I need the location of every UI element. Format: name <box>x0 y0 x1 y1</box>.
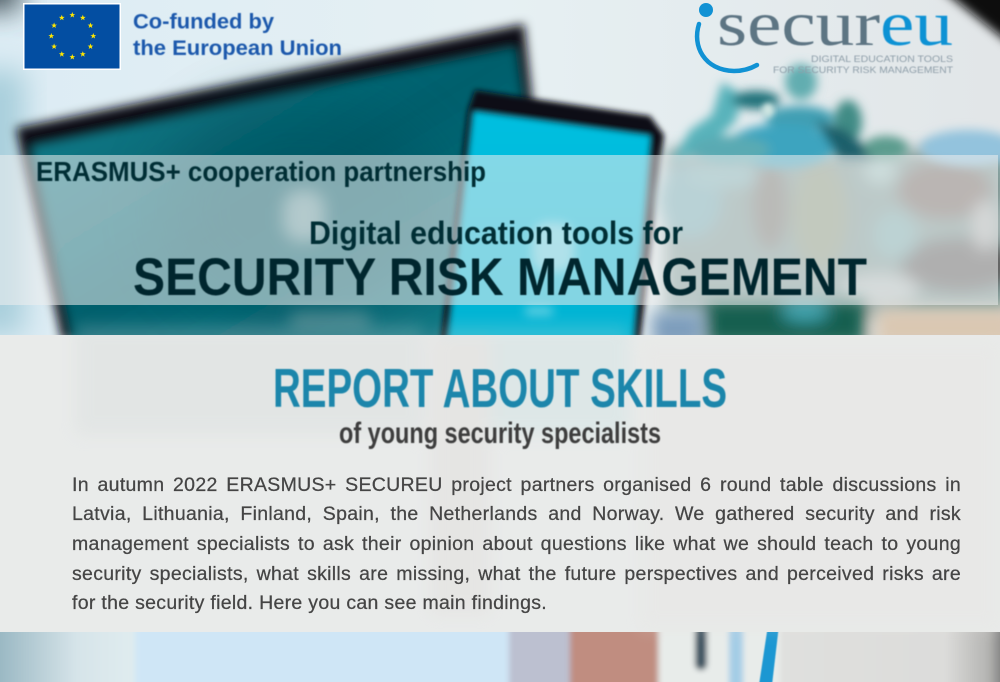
dark foliage below the band <box>652 300 1000 352</box>
EU flag <box>23 3 121 70</box>
logo tagline: DIGITAL EDUCATION TOOLS <box>811 54 953 65</box>
co-funded text <box>133 10 342 60</box>
co-funded text: Co-funded by <box>133 10 274 34</box>
top right dark corner <box>930 0 1000 52</box>
light spot between leaves <box>762 103 774 117</box>
title line one: Digital education tools for <box>309 215 683 251</box>
intro paragraph: In autumn 2022 ERASMUS+ SECUREU project partners organised 6 round table discussions in <box>72 474 961 496</box>
teal leaves above the band <box>672 64 1000 168</box>
co-funded text: the European Union <box>133 37 342 60</box>
translucent title band <box>0 155 998 305</box>
report subheading: of young security specialists <box>339 417 661 450</box>
faint photo ghost in panel <box>75 325 1000 630</box>
logo mark: dot and smile arc <box>697 3 757 71</box>
translucent report panel <box>0 325 1000 632</box>
bottom photo strip <box>0 620 1000 682</box>
intro paragraph: Latvia, Lithuania, Finland, Spain, the Netherlands and Norway. We gathered security and risk <box>72 503 961 525</box>
laptop <box>16 24 532 345</box>
intro paragraph: for the security field. Here you can see main findings. <box>72 592 547 614</box>
erasmus heading: ERASMUS+ cooperation partnership <box>36 156 486 187</box>
laptop lock ghost <box>283 190 370 328</box>
intro paragraph: management specialists to ask their opinion about questions like what we should teach to young <box>72 533 961 555</box>
logo tagline: FOR SECURITY RISK MANAGEMENT <box>773 65 953 76</box>
left background shading <box>0 0 25 335</box>
phone <box>440 90 664 350</box>
logo tagline <box>773 54 953 76</box>
pale leaves behind the band <box>658 150 1000 315</box>
intro paragraph <box>72 474 961 614</box>
phone lock ghost <box>525 222 574 315</box>
intro paragraph: security specialists, what skills are missing, what the future perspectives and perceived risks are <box>72 563 961 585</box>
report heading: REPORT ABOUT SKILLS <box>273 357 727 419</box>
plant <box>652 64 1000 352</box>
ring of twelve stars <box>48 12 96 60</box>
title line two: SECURITY RISK MANAGEMENT <box>133 248 867 307</box>
laptop screen dark circle <box>160 100 440 320</box>
secureu logo <box>697 0 953 76</box>
